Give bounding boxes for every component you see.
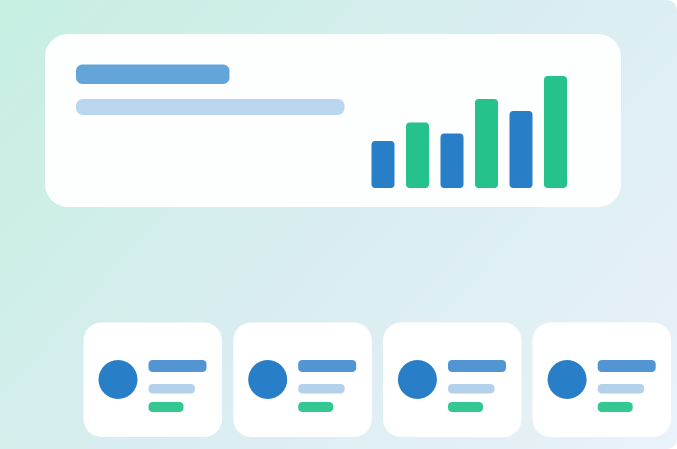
icon: circle — [248, 360, 287, 399]
text placeholder lines — [148, 360, 206, 412]
icon: circle — [548, 360, 587, 399]
icon: circle — [98, 360, 138, 399]
text placeholder lines — [448, 360, 506, 412]
text placeholder lines — [598, 360, 656, 412]
panel: small card 4 — [532, 322, 671, 437]
subheading placeholder bar — [76, 99, 344, 115]
panel: main card — [45, 34, 621, 207]
icon: circle — [398, 360, 437, 399]
heading placeholder bar — [76, 64, 230, 84]
panel: small card 1 — [84, 322, 222, 437]
bar chart — [372, 76, 567, 188]
panel: small card 2 — [233, 322, 372, 437]
text placeholder lines — [298, 360, 356, 412]
panel: small card 3 — [383, 322, 522, 437]
